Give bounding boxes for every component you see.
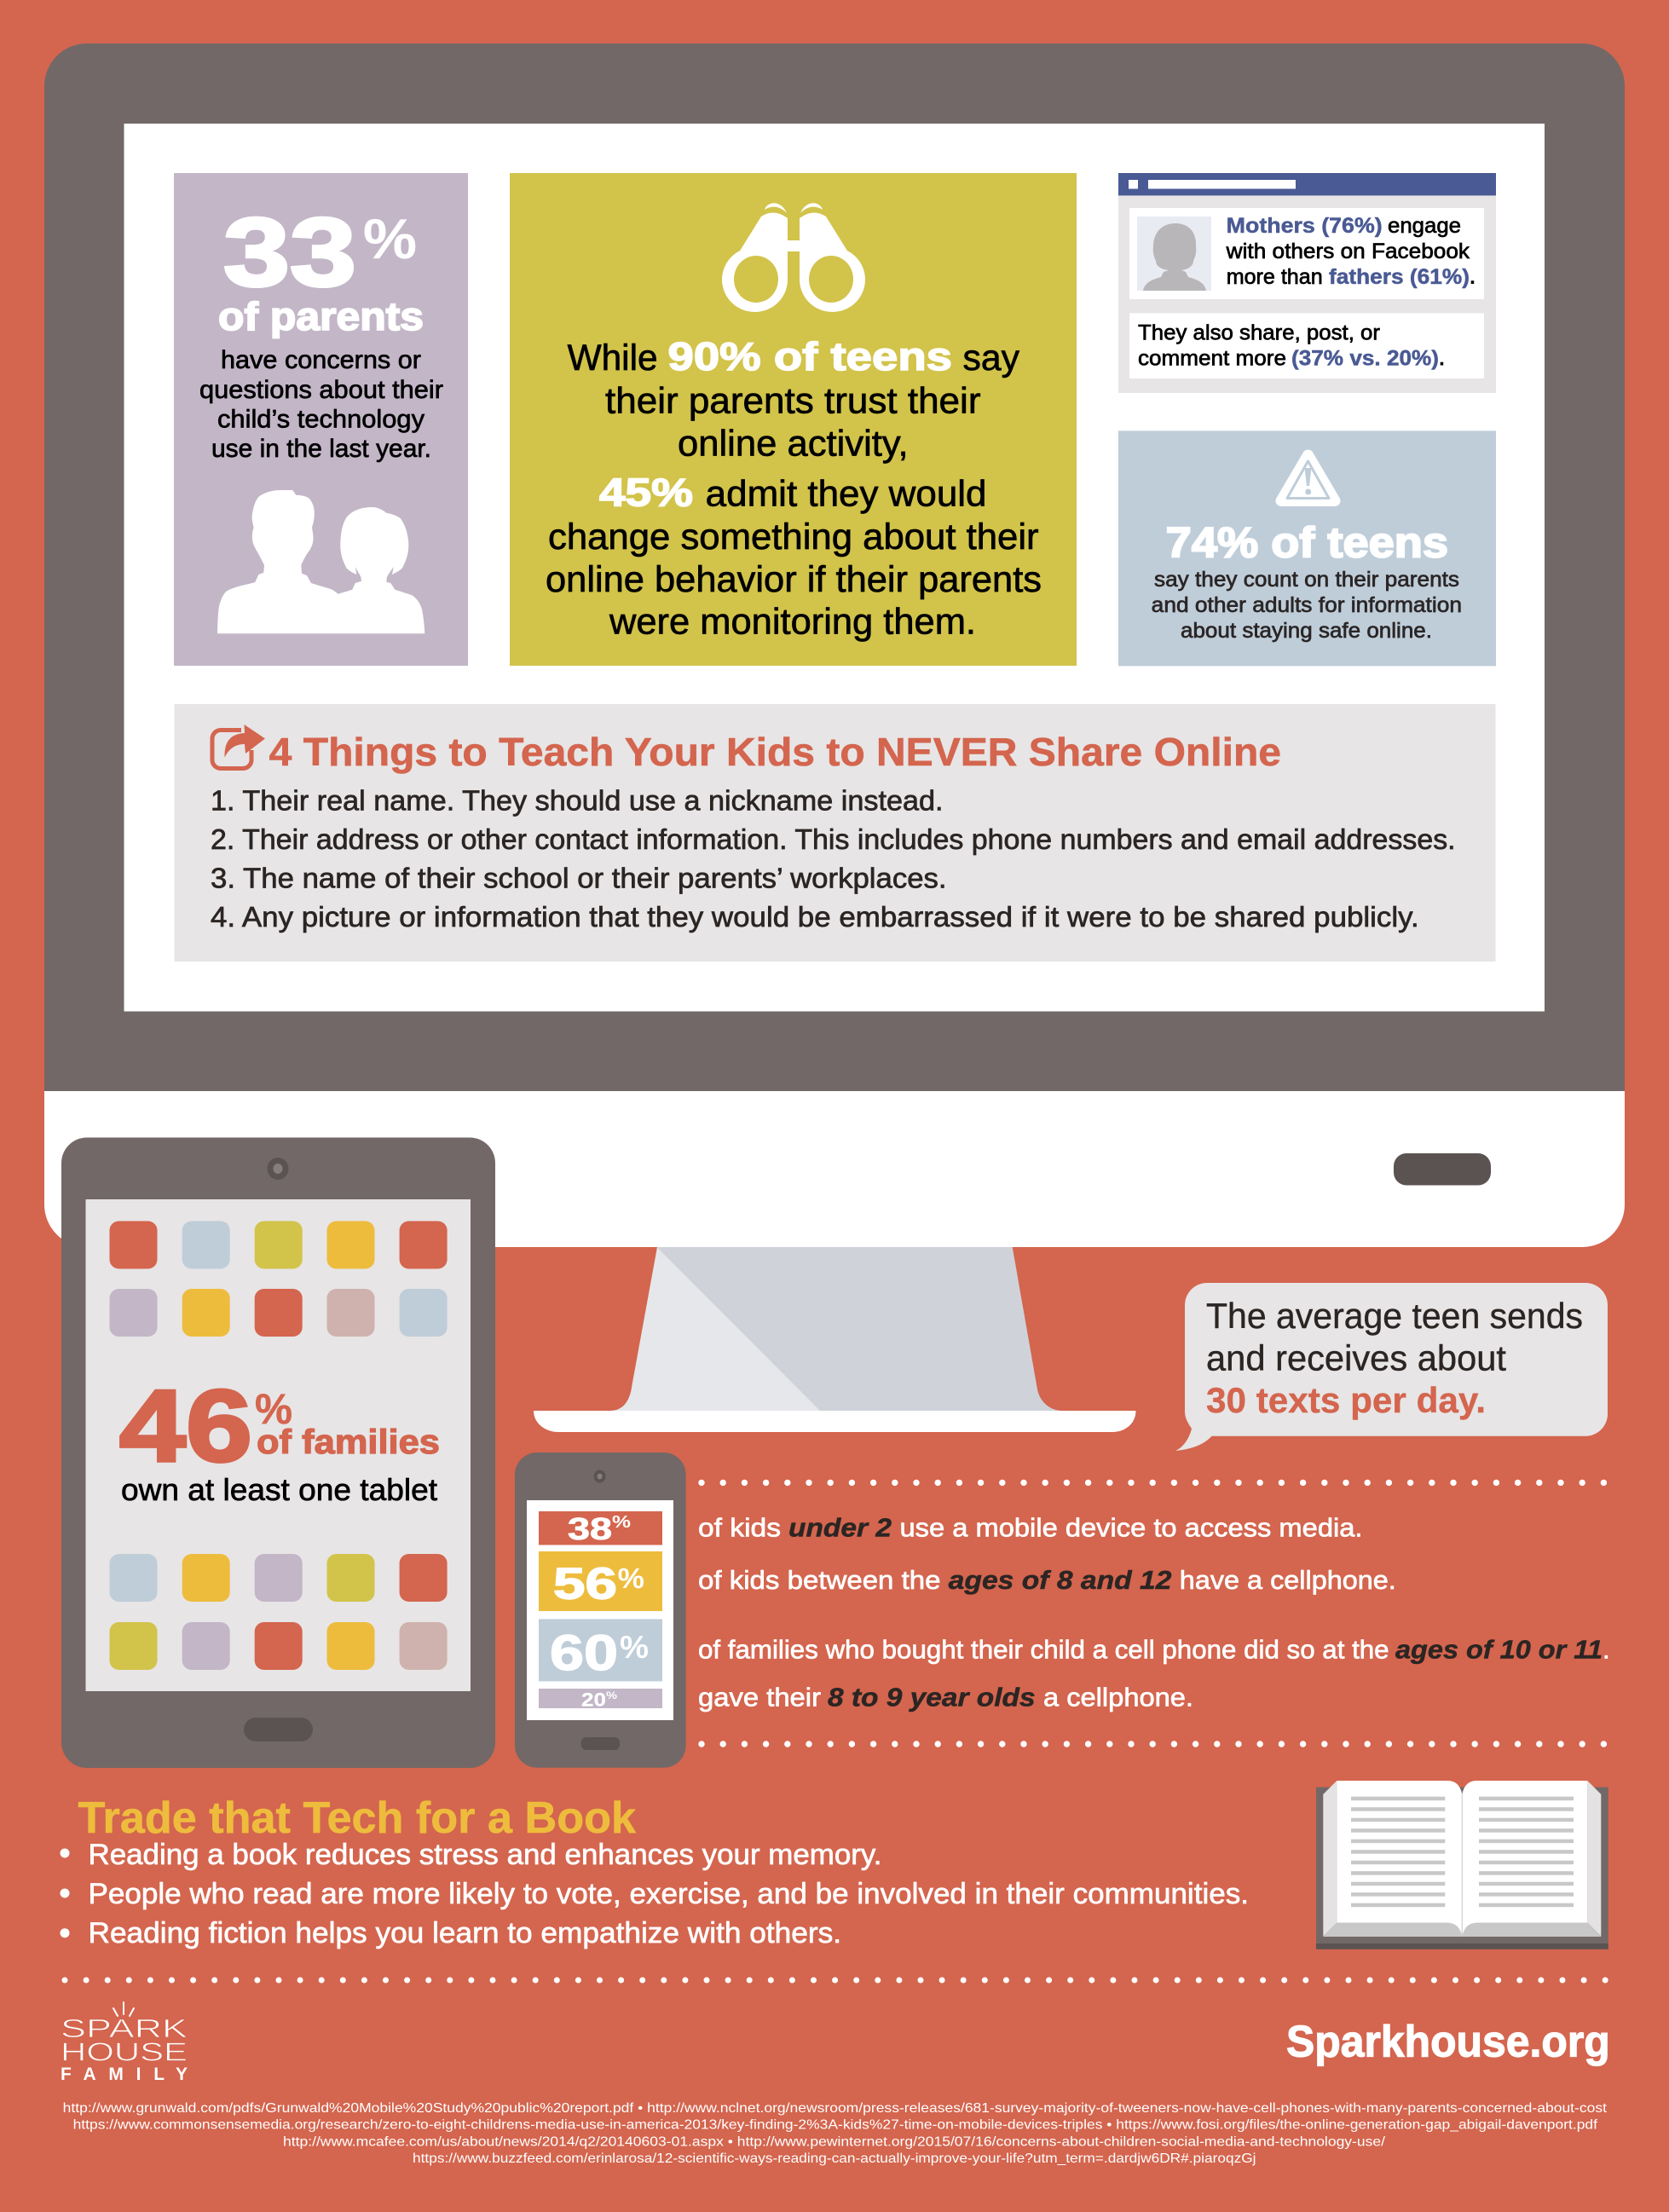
stat bar 38%: 38 (568, 1511, 612, 1546)
panel: facebook: with others on Facebook (1226, 240, 1470, 263)
panel: facebook: fathers (61%) (1329, 265, 1470, 289)
panel: 74% of teens: about staying safe online. (1181, 619, 1432, 643)
panel: 33% of parents: child’s technology (217, 406, 424, 433)
tablet stat: 46 (119, 1369, 252, 1483)
mobile statistics text: . (1603, 1635, 1610, 1664)
stat bar 60%: % (620, 1630, 649, 1665)
panel: 4 things: 3. The name of their school or their parents’ workplaces. (211, 863, 947, 894)
panel: teens trust (510, 173, 1077, 666)
stat bar 38%: % (612, 1513, 631, 1532)
section: trade that tech for a book: Reading a book reduces stress and enhances your memory. (89, 1839, 881, 1871)
stat bar 56% (539, 1551, 662, 1611)
source links: http://www.mcafee.com/us/about/news/2014/q2/20140603-01.aspx • http://www.pewinternet.org/2015/07/16/concerns-about-children-social-media-and-technology-use/ (283, 2135, 1386, 2150)
logo: spark house family: HOUSE (61, 2037, 188, 2067)
logo: spark house family: SPARK (61, 2013, 188, 2043)
panel: facebook: (37% vs. 20%) (1291, 347, 1439, 371)
panel: facebook: . (1439, 347, 1445, 371)
icon: parents silhouette (217, 490, 424, 633)
panel: 74% of teens: and other adults for information (1152, 593, 1462, 617)
panel: 4 things: 4. Any picture or information that they would be embarrassed if it were to be shared publicly. (211, 901, 1419, 933)
app icons (109, 1221, 448, 1670)
heading: Trade that Tech for a Book (78, 1793, 636, 1843)
stat bar 56%: 56 (553, 1560, 617, 1609)
panel: 4 things: 1. Their real name. They should use a nickname instead. (211, 785, 943, 817)
mobile statistics text: under 2 (788, 1513, 892, 1543)
panel: teens trust: their parents trust their (605, 381, 980, 422)
tablet stat (119, 1369, 440, 1507)
panel: teens trust: admit they would (706, 474, 987, 515)
panel: facebook: . (1470, 265, 1476, 289)
panel: 74% of teens: 74% of teens (1166, 519, 1448, 567)
panel: facebook: Mothers (76%) (1227, 214, 1383, 238)
panel: facebook: They also share, post, or (1138, 321, 1380, 345)
tablet stat: of families (257, 1424, 440, 1461)
speech bubble: The average teen sends (1206, 1296, 1583, 1336)
heading: 4 Things to Teach Your Kids to NEVER Share Online (269, 730, 1281, 774)
panel: 33% of parents: questions about their (199, 376, 443, 404)
stat bar 56%: % (618, 1562, 644, 1594)
icon: book (1316, 1781, 1608, 1949)
monitor (44, 43, 1625, 1247)
stat bar 60%: 60 (550, 1626, 618, 1681)
mobile statistics text: a cellphone. (1043, 1683, 1193, 1712)
panel: 74% of teens (1118, 430, 1496, 666)
mobile statistics text: of families who bought their child a cell phone did so at the (698, 1635, 1389, 1664)
source links: https://www.commonsensemedia.org/research/zero-to-eight-childrens-media-use-in-america-2013/key-finding-2%3A-kids%27-time-on-mobile-devices-triples • https://www.fosi.org/files/the-online-generation-gap_abigail-davenport.pdf (73, 2118, 1598, 2133)
icon: warning triangle (1281, 455, 1335, 501)
panel: 33% of parents: have concerns or (221, 346, 421, 374)
panel: teens trust: While (568, 338, 658, 378)
mobile statistics text: 8 to 9 year olds (828, 1683, 1036, 1712)
panel: facebook (1118, 173, 1496, 393)
source links: http://www.grunwald.com/pdfs/Grunwald%20Mobile%20Study%20public%20report.pdf • http://www.nclnet.org/newsroom/press-releases/681-survey-majority-of-tweeners-now-have-cell-phones-with-many-parents-concerned-about-cost (63, 2101, 1608, 2116)
tablet (61, 1137, 495, 1768)
speech bubble: and receives about (1206, 1338, 1506, 1377)
stat bar 60% (539, 1619, 662, 1681)
panel: teens trust: say (963, 338, 1019, 378)
panel: teens trust: were monitoring them. (609, 602, 976, 643)
stat bar 20%: 20 (581, 1689, 606, 1710)
source links: https://www.buzzfeed.com/erinlarosa/12-scientific-ways-reading-can-actually-improve-your-life?utm_term=.dardjw6DR#.piaroqzGj (413, 2151, 1256, 2166)
mobile statistics text: ages of 10 or 11 (1395, 1635, 1603, 1664)
mobile statistics text: gave their (698, 1683, 821, 1712)
panel: 33% of parents: % (363, 207, 417, 270)
speech bubble: 30 texts per day. (1206, 1380, 1486, 1420)
speech bubble (1175, 1283, 1608, 1451)
logo: spark house family: FAMILY (61, 2065, 188, 2084)
tablet stat: % (255, 1385, 292, 1433)
section: trade that tech for a book: People who read are more likely to vote, exercise, and be involved in their communities. (89, 1878, 1249, 1910)
website: Sparkhouse.org (1286, 2017, 1610, 2066)
phone (515, 1453, 686, 1768)
panel: 33% of parents: use in the last year. (211, 435, 431, 463)
mobile statistics text: use a mobile device to access media. (900, 1513, 1362, 1543)
icon: share (212, 725, 265, 769)
panel: 4 things: 2. Their address or other contact information. This includes phone numbers and email addresses. (211, 823, 1456, 855)
source links (63, 2101, 1608, 2166)
mobile statistics text: of kids (698, 1513, 781, 1543)
panel: teens trust: change something about their (548, 517, 1039, 557)
panel: facebook: more than (1227, 265, 1323, 289)
icon: binoculars (722, 203, 865, 312)
panel: 74% of teens: say they count on their parents (1154, 568, 1459, 592)
section: trade that tech for a book (60, 1793, 1249, 1949)
logo: spark house family (61, 2002, 188, 2084)
panel: teens trust: online activity, (678, 423, 909, 464)
stat bar 20%: % (606, 1689, 617, 1701)
monitor stand (534, 1247, 1135, 1432)
section: trade that tech for a book: Reading fiction helps you learn to empathize with others. (89, 1917, 841, 1949)
panel: 33% of parents: 33 (223, 199, 356, 307)
mobile statistics text: have a cellphone. (1180, 1565, 1396, 1595)
mobile statistics text: ages of 8 and 12 (949, 1565, 1171, 1595)
stat bar 20% (539, 1689, 662, 1710)
avatar (1137, 217, 1211, 291)
panel: 33% of parents: of parents (218, 294, 424, 338)
mobile statistics text (698, 1513, 1610, 1712)
panel: teens trust: 90% of teens (668, 334, 952, 378)
mobile statistics text: of kids between the (698, 1565, 941, 1595)
panel: facebook: comment more (1138, 347, 1286, 371)
panel: facebook: engage (1388, 214, 1461, 238)
stat bar 38% (539, 1511, 662, 1546)
panel: teens trust: 45% (599, 471, 693, 515)
panel: 4 things (174, 704, 1495, 962)
panel: teens trust: online behavior if their parents (546, 559, 1042, 600)
panel: 33% of parents (174, 173, 468, 666)
tablet stat: own at least one tablet (121, 1472, 437, 1507)
